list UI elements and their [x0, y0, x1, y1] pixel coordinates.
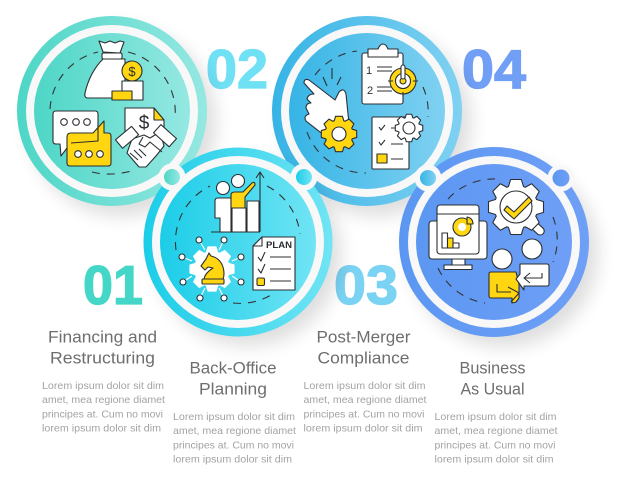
body copy: principes at. Cum no movi	[42, 409, 163, 420]
panel: circle 3 compliance	[272, 16, 471, 216]
icon: money bag	[85, 41, 143, 100]
body copy: Lorem ipsum dolor sit dim	[42, 381, 164, 392]
icon: contract handshake: $	[139, 113, 150, 134]
connector dot 3	[414, 164, 442, 192]
number 04: 04	[462, 38, 526, 100]
body copy: lorem ipsum dolor sit dim	[42, 424, 161, 435]
body copy: amet, mea regione diamet	[304, 395, 427, 406]
icon: pointing hand with gear	[304, 68, 357, 152]
number 03: 03	[334, 254, 398, 316]
icon: gear with magnifier check	[489, 180, 546, 237]
panel: circle 4 business as usual	[399, 147, 598, 347]
heading: business as usual	[460, 360, 526, 398]
body copy	[304, 381, 427, 435]
icon: people conversation	[489, 239, 549, 303]
body copy	[173, 412, 296, 466]
icon: chat bubbles	[53, 111, 111, 166]
heading: post-merger: Post-Merger	[316, 328, 411, 346]
icon: money bag: $	[128, 64, 136, 79]
icon: team and growth chart	[211, 172, 264, 232]
heading: financing: Restructuring	[50, 350, 155, 368]
icon: checklist with gear	[372, 114, 423, 169]
icon: clipboard with target: 1	[366, 65, 372, 77]
number 02: 02	[206, 38, 268, 100]
body copy	[42, 381, 165, 435]
heading: back-office: Planning	[199, 380, 267, 398]
number 01: 01	[83, 254, 143, 316]
body copy: Lorem ipsum dolor sit dim	[434, 412, 556, 423]
heading: business as usual: As Usual	[460, 380, 524, 398]
body copy: amet, mea regione diamet	[173, 426, 296, 437]
body copy: amet, mea regione diamet	[42, 395, 165, 406]
body copy: amet, mea regione diamet	[434, 426, 558, 437]
connector dot 4	[548, 164, 574, 192]
text block: step 1	[42, 328, 165, 435]
heading: financing	[48, 328, 157, 368]
text block: step 4	[434, 360, 558, 466]
panel: circle 2 planning	[144, 148, 341, 346]
body copy: principes at. Cum no movi	[434, 440, 556, 451]
heading: business as usual: Business	[460, 360, 526, 378]
body copy: lorem ipsum dolor sit dim	[304, 424, 422, 435]
heading: back-office: Back-Office	[190, 360, 276, 378]
connector dot 1	[158, 164, 186, 190]
body copy: Lorem ipsum dolor sit dim	[173, 412, 295, 423]
heading: financing: Financing and	[48, 328, 157, 346]
icon: clipboard with target: 2	[367, 85, 373, 97]
body copy: lorem ipsum dolor sit dim	[173, 455, 292, 466]
text block: step 2	[173, 360, 296, 466]
heading: post-merger: Compliance	[318, 350, 410, 368]
icon: plan document: PLAN	[266, 240, 292, 251]
icon: clipboard with target	[362, 44, 418, 104]
heading: back-office	[190, 360, 276, 398]
connector dot 2	[290, 164, 318, 190]
heading: post-merger	[316, 328, 411, 368]
text block: step 3	[304, 328, 427, 435]
body copy	[434, 412, 558, 466]
body copy: principes at. Cum no movi	[173, 440, 294, 451]
icon: strategy gear with knight	[179, 237, 244, 301]
icon: plan document	[253, 237, 295, 290]
body copy: lorem ipsum dolor sit dim	[434, 455, 554, 466]
icon: contract handshake	[115, 108, 177, 167]
body copy: Lorem ipsum dolor sit dim	[304, 381, 426, 392]
body copy: principes at. Cum no movi	[304, 409, 424, 420]
panel: circle 1 financing	[17, 16, 216, 216]
icon: monitor with charts	[429, 205, 487, 270]
